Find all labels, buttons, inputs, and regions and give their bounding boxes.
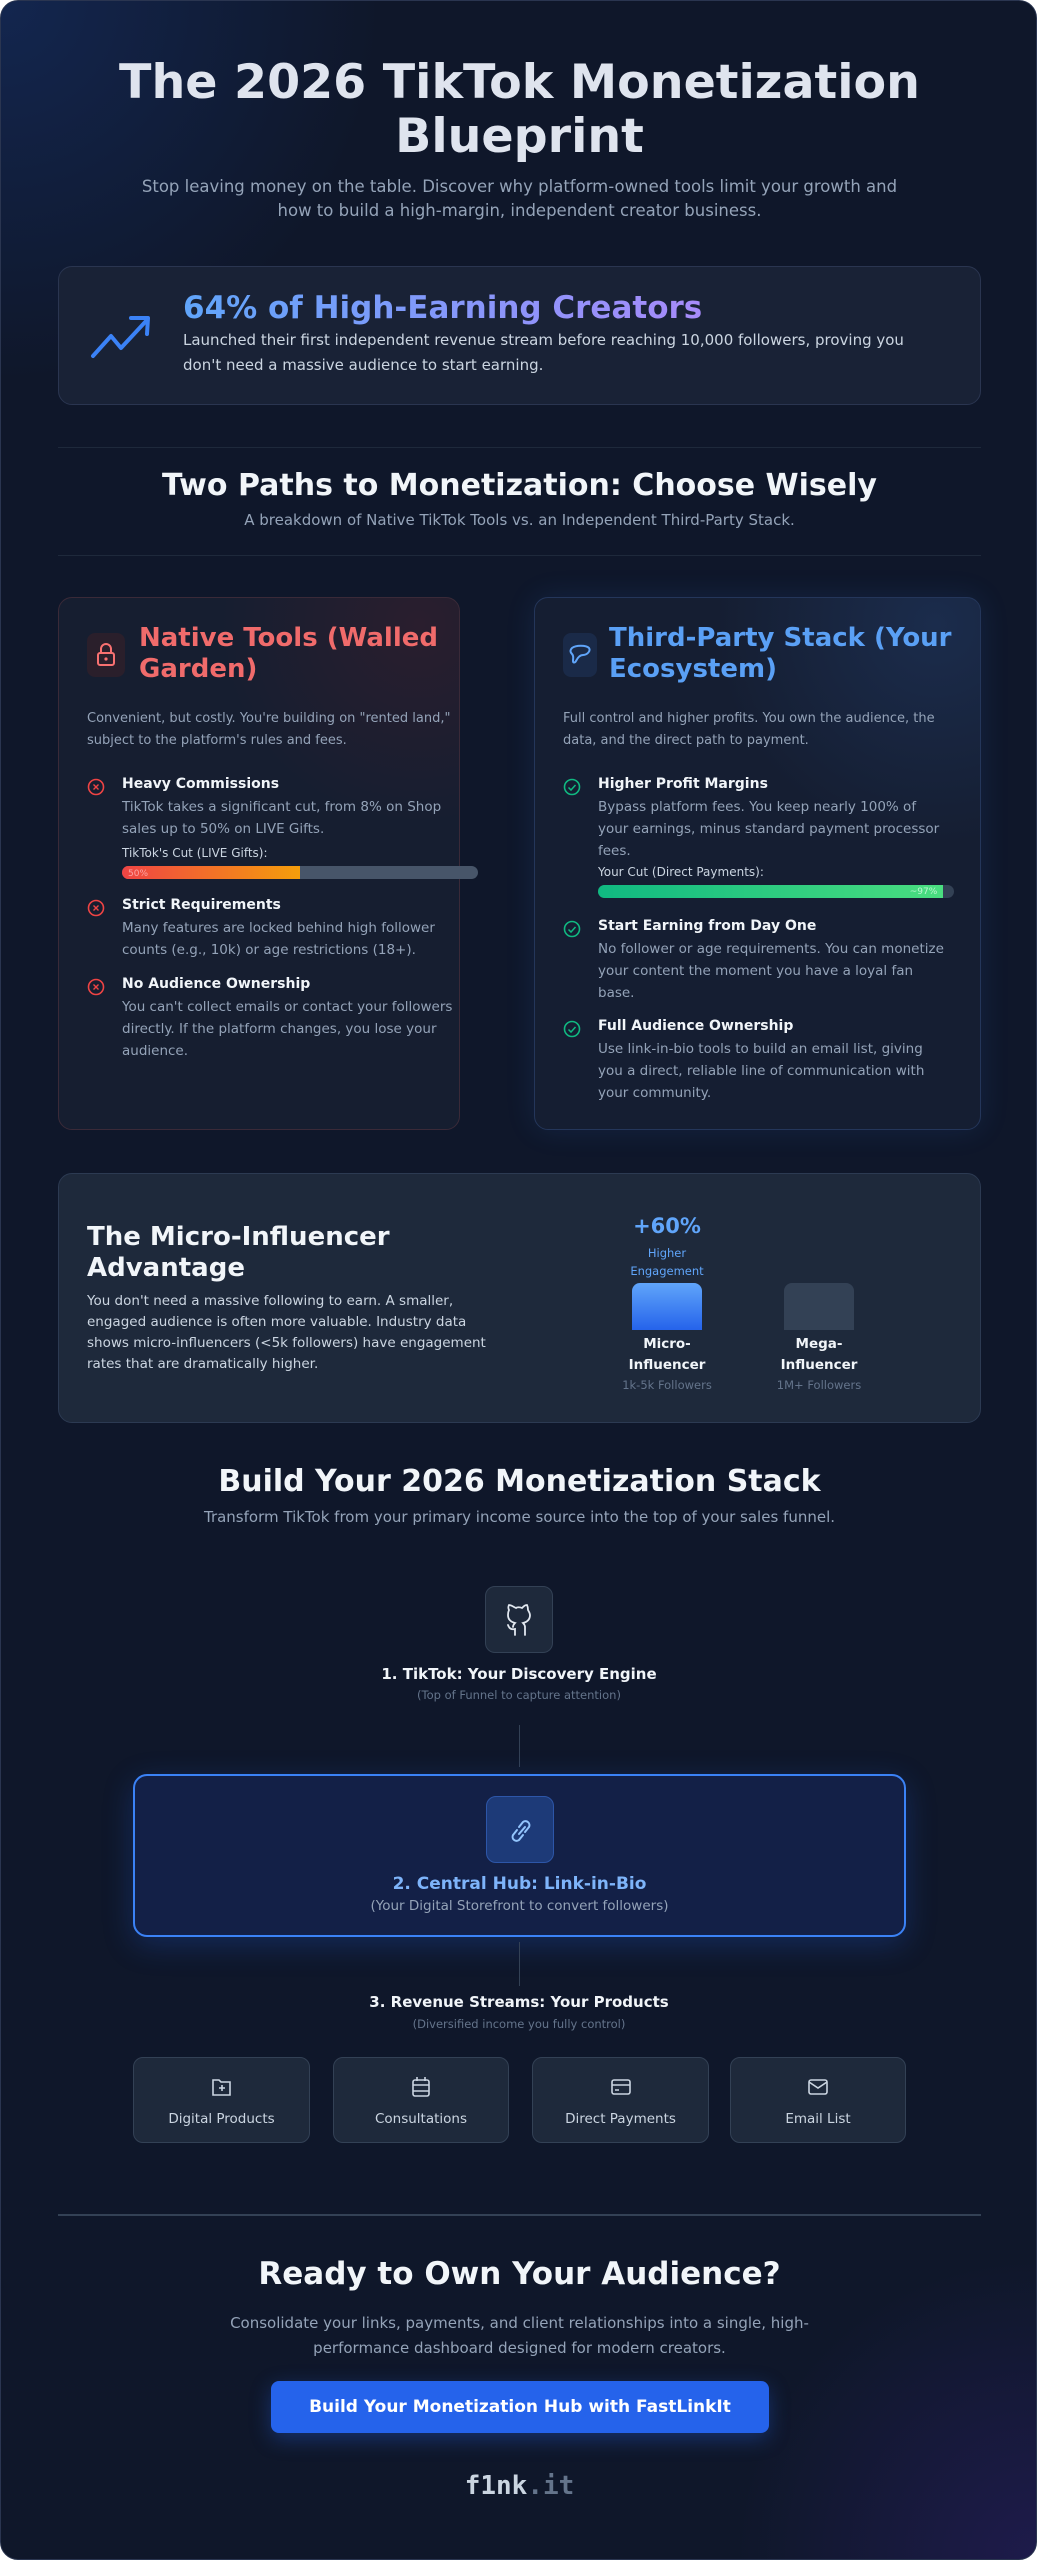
section heading: two paths: Two Paths to Monetization: Choose Wisely <box>162 468 877 503</box>
cta button: Build Your Monetization Hub with FastLinkIt <box>309 2397 731 2417</box>
panel: third-party stack: Your Cut (Direct Payments): <box>598 865 764 879</box>
native description: Convenient, but costly. You're building on "rented land," subject to the platform's rules and fees. <box>87 711 450 748</box>
step 3: revenue streams: (Diversified income you fully control) <box>413 2017 625 2031</box>
title <box>119 55 920 164</box>
section subtitle: Transform TikTok from your primary income source into the top of your sales funnel. <box>204 1508 835 1526</box>
step 2: central hub: 2. Central Hub: Link-in-Bio <box>393 1874 646 1894</box>
third-party heading: Third-Party Stack (Your Ecosystem) <box>609 623 952 684</box>
cta heading: Ready to Own Your Audience? <box>258 2256 781 2292</box>
icon: lock <box>87 633 125 677</box>
bar: 97%: ~97% <box>910 887 937 897</box>
product: direct payments <box>532 2057 709 2143</box>
logo: f1nk.it <box>465 2471 574 2501</box>
stat card <box>58 266 981 405</box>
panel: third-party stack <box>534 597 981 1130</box>
panel: native tools: TikTok takes a significant cut, from 8% on Shop sales up to 50% on LIVE Gifts. <box>122 799 441 837</box>
step 1: tiktok <box>381 1586 657 1702</box>
step 1: tiktok: 1. TikTok: Your Discovery Engine <box>381 1665 657 1683</box>
step 3: revenue streams <box>369 1993 669 2031</box>
product: digital products <box>133 2057 310 2143</box>
item: heavy commissions <box>88 776 478 879</box>
cta button <box>271 2381 769 2433</box>
icon: tiktok <box>485 1586 553 1653</box>
cta text: Consolidate your links, payments, and client relationships into a single, high-performance dashboard designed for modern creators. <box>230 2314 809 2357</box>
item: strict requirements <box>88 897 435 958</box>
chart: engagement bars: Micro- <box>643 1336 691 1352</box>
panel: third-party stack: Full Audience Ownership <box>598 1018 793 1034</box>
panel: native tools: TikTok's Cut (LIVE Gifts): <box>122 846 268 860</box>
product: consultations: Consultations <box>375 2111 467 2127</box>
icon: ecosystem <box>563 633 597 677</box>
panel: native tools: No Audience Ownership <box>122 976 310 992</box>
bar: micro <box>632 1283 702 1330</box>
panel: third-party stack: No follower or age requirements. You can monetize your content the moment you have a loyal fan base. <box>598 941 944 1001</box>
chart: engagement bars: Influencer <box>781 1357 857 1373</box>
chart: engagement bars: 1k-5k Followers <box>622 1378 712 1392</box>
chart: engagement bars: Higher <box>648 1246 686 1260</box>
product: direct payments: Direct Payments <box>565 2111 676 2127</box>
panel: native tools: Many features are locked behind high follower counts (e.g., 10k) or age restrictions (18+). <box>122 920 435 958</box>
panel: native tools: You can't collect emails or contact your followers directly. If the platform changes, you lose your audience. <box>122 999 452 1059</box>
section heading: build stack: Build Your 2026 Monetization Stack <box>218 1464 821 1499</box>
chart: engagement bars <box>622 1214 861 1392</box>
panel: third-party stack: Bypass platform fees. You keep nearly 100% of your earnings, minus standard payment processor fees. <box>598 799 939 859</box>
bar: 50%: 50% <box>128 869 148 879</box>
step 1: tiktok: (Top of Funnel to capture attention) <box>417 1688 621 1702</box>
subtitle: Stop leaving money on the table. Discover why platform-owned tools limit your growth and how to build a high-margin, independent creator business. <box>142 177 897 220</box>
third-party description: Full control and higher profits. You own the audience, the data, and the direct path to payment. <box>563 711 935 748</box>
panel: third-party stack: Higher Profit Margins <box>598 776 768 792</box>
panel: native tools: Heavy Commissions <box>122 776 279 792</box>
chart: engagement bars: +60% <box>633 1214 701 1238</box>
panel: native tools <box>58 597 460 1130</box>
panel: micro-influencer advantage <box>58 1173 981 1423</box>
chart: engagement bars: Mega- <box>796 1336 842 1352</box>
product: email list: Email List <box>785 2111 851 2127</box>
item: no audience ownership <box>88 976 452 1059</box>
item: start earning <box>564 918 944 1001</box>
panel: native tools: Strict Requirements <box>122 897 281 913</box>
item: full audience ownership <box>564 1018 924 1101</box>
icon: trending arrow <box>90 316 150 358</box>
product: consultations <box>333 2057 509 2143</box>
icon: link <box>486 1796 554 1863</box>
stat text: Launched their first independent revenue stream before reaching 10,000 followers, proving you don't need a massive audience to start earning. <box>183 331 904 374</box>
chart: engagement bars: Engagement <box>630 1264 704 1278</box>
chart: engagement bars: Influencer <box>629 1357 705 1373</box>
panel: third-party stack: Start Earning from Day One <box>598 918 816 934</box>
panel: third-party stack: Use link-in-bio tools to build an email list, giving you a direct, reliable line of communication with your community. <box>598 1041 924 1101</box>
step 3: revenue streams: 3. Revenue Streams: Your Products <box>369 1993 669 2011</box>
bar: 50% <box>122 866 478 879</box>
stat heading: 64% of High-Earning Creators <box>183 290 702 326</box>
product: digital products: Digital Products <box>168 2111 275 2127</box>
native heading: Native Tools (Walled Garden) <box>139 623 438 684</box>
section subtitle: A breakdown of Native TikTok Tools vs. an Independent Third-Party Stack. <box>244 511 795 529</box>
bar: 97% <box>598 885 954 898</box>
step 2: central hub: (Your Digital Storefront to convert followers) <box>370 1898 669 1914</box>
step 2: central hub <box>133 1774 906 1937</box>
title: The 2026 TikTok Monetization <box>119 55 920 110</box>
item: higher profit margins <box>564 776 954 898</box>
chart: engagement bars: 1M+ Followers <box>777 1378 861 1392</box>
title: Blueprint <box>395 109 644 164</box>
bar: mega <box>784 1283 854 1330</box>
micro heading: The Micro-Influencer Advantage <box>87 1222 390 1283</box>
product: email list <box>730 2057 906 2143</box>
micro text: You don't need a massive following to earn. A smaller, engaged audience is often more valuable. Industry data shows micro-influencers (<5k followers) have engagement rates that are dramatically higher. <box>87 1293 486 1372</box>
